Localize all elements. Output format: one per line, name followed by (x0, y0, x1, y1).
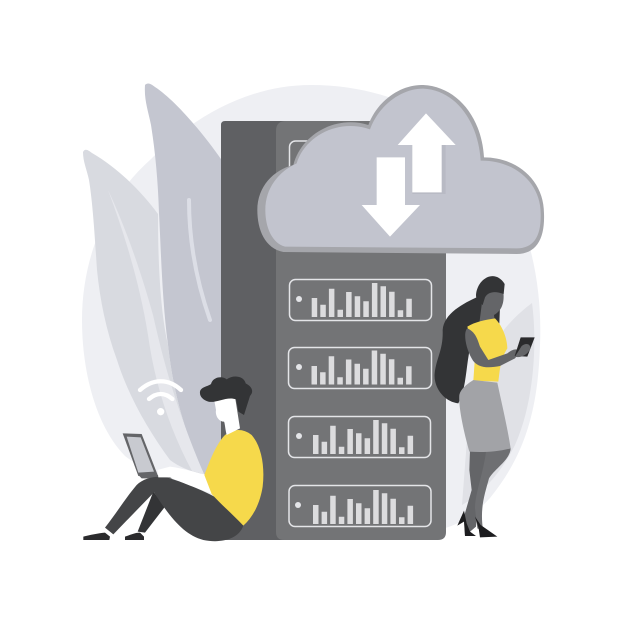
server slot 2 (288, 348, 432, 388)
back leg (464, 450, 488, 536)
background blob (82, 85, 540, 535)
server slot 1 (290, 280, 432, 320)
far leg (138, 492, 165, 533)
server slot 3 (288, 416, 430, 458)
leaf vein (108, 190, 204, 474)
top slot (290, 141, 430, 181)
right leaf (462, 303, 534, 505)
cloud body (265, 89, 541, 248)
cloud outline (257, 85, 544, 254)
upload arrow (398, 113, 456, 192)
arm (157, 467, 213, 494)
top (467, 318, 507, 382)
man with laptop (83, 376, 263, 541)
skirt (459, 380, 511, 452)
server slot 4 (289, 486, 431, 526)
cloud (257, 85, 544, 254)
server front panel (276, 121, 446, 540)
shoes (457, 511, 497, 537)
hair cap (476, 276, 505, 305)
shoes (83, 533, 144, 540)
left leaf (83, 150, 204, 474)
front leg (475, 448, 511, 532)
neck and face (213, 395, 240, 435)
arm (465, 328, 520, 367)
wifi symbol (140, 381, 181, 414)
back leaf (145, 84, 225, 480)
neck and face (479, 292, 504, 323)
phone (515, 337, 535, 357)
download arrow (362, 157, 420, 237)
server side panel (221, 121, 290, 540)
woman (435, 276, 535, 537)
hair (200, 376, 252, 415)
server (221, 121, 446, 540)
upload arrow shadow (412, 145, 446, 194)
laptop (123, 433, 173, 478)
hand (515, 344, 530, 357)
shirt (204, 430, 263, 526)
legs (105, 477, 243, 541)
long hair (435, 297, 500, 403)
